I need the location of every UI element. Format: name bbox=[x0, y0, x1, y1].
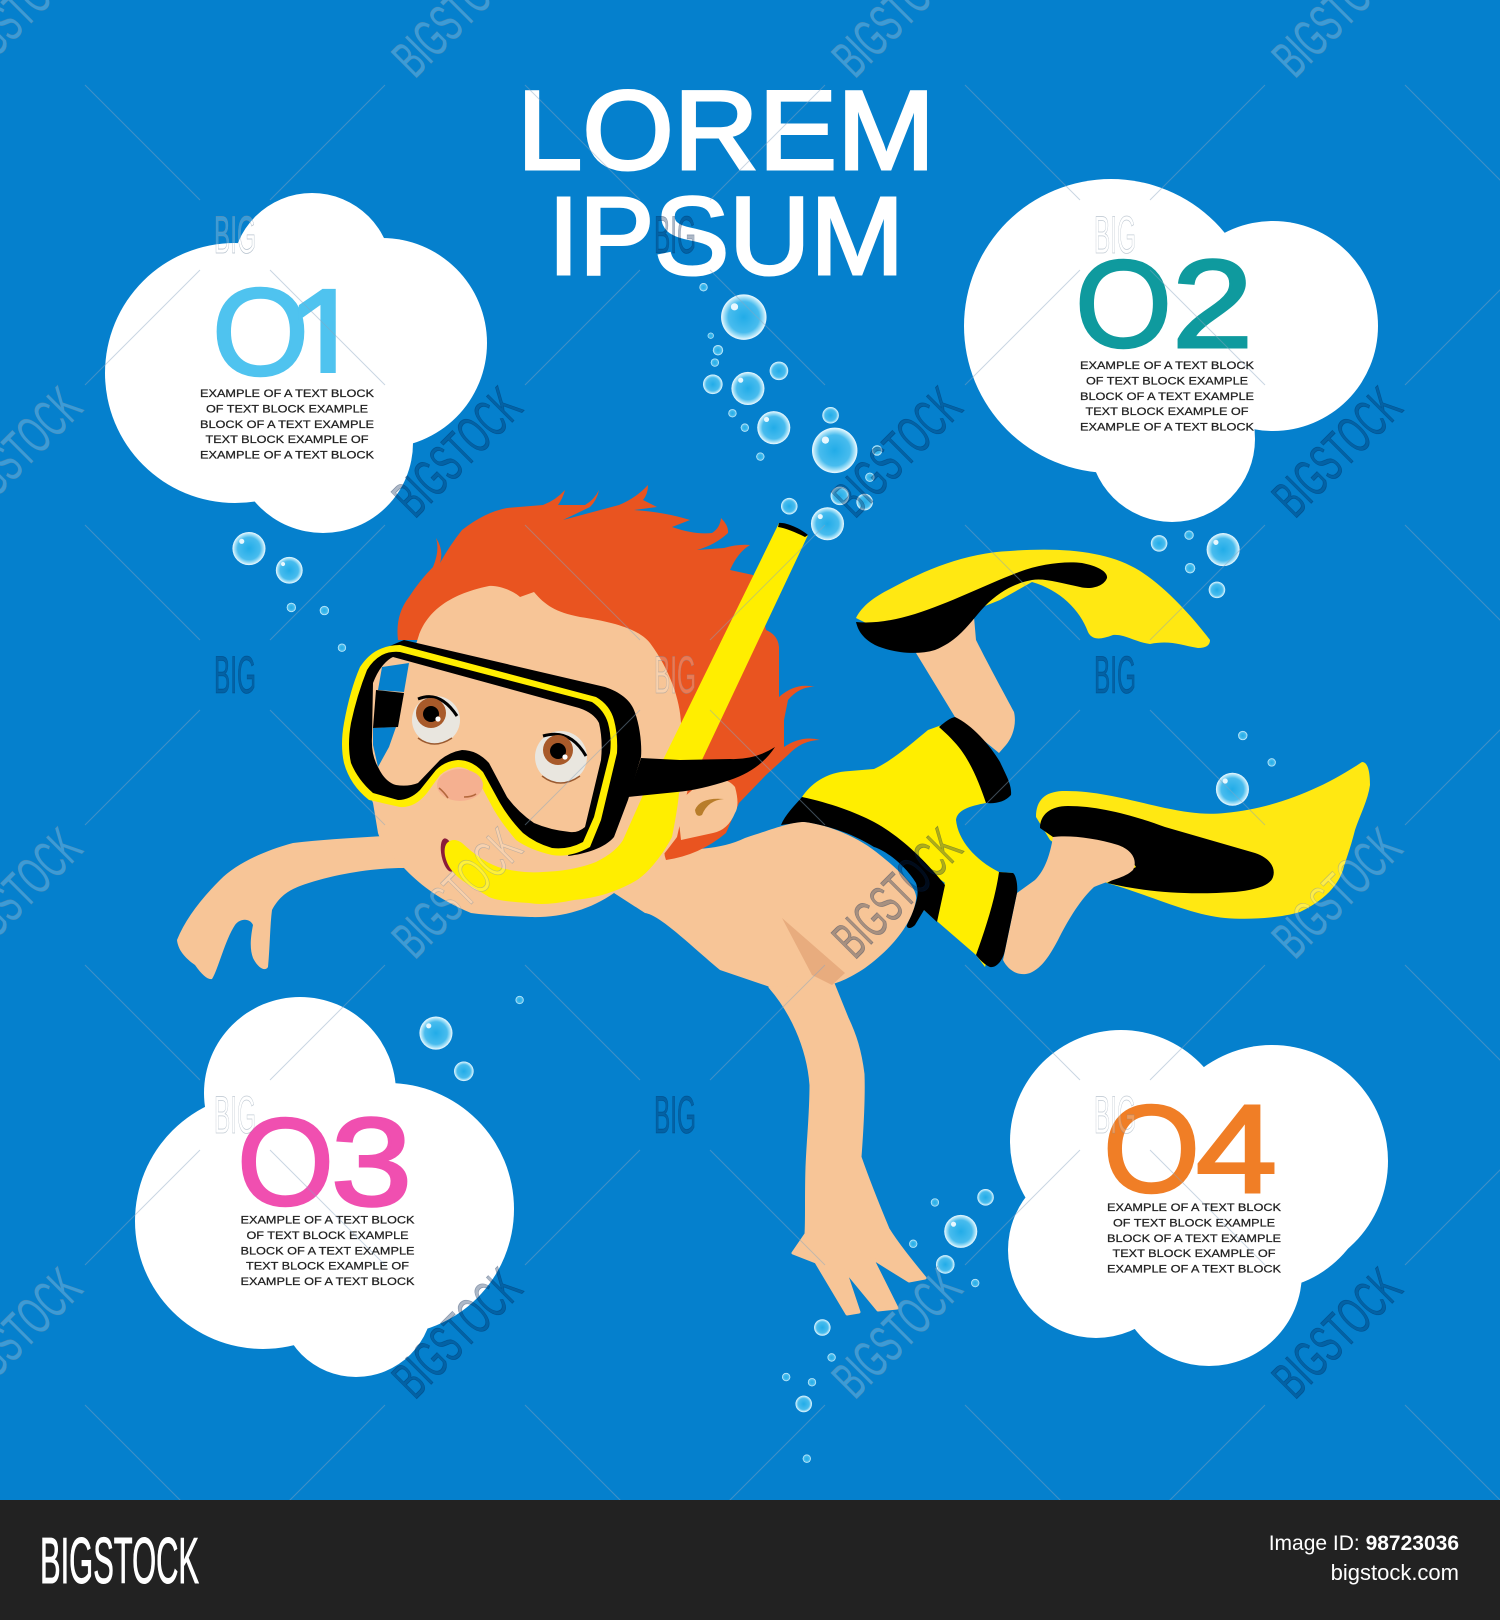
footer bar: BIGSTOCK bbox=[40, 1524, 199, 1597]
footer site url: bigstock.com bbox=[1331, 1560, 1459, 1585]
text block 01: OF TEXT BLOCK EXAMPLE bbox=[206, 404, 368, 416]
number 04: 4 bbox=[1196, 1080, 1277, 1219]
text: BIG bbox=[1094, 1086, 1136, 1145]
text block 03: EXAMPLE OF A TEXT BLOCK bbox=[240, 1276, 415, 1288]
watermark: BIG stamps: BIG bbox=[654, 206, 696, 265]
text block 03: TEXT BLOCK EXAMPLE OF bbox=[246, 1260, 409, 1272]
text block 01: TEXT BLOCK EXAMPLE OF bbox=[206, 434, 369, 446]
text block 03: EXAMPLE OF A TEXT BLOCK bbox=[240, 1214, 415, 1226]
watermark: BIGSTOCK stamps: BIGSTOCK bbox=[1262, 1258, 1413, 1409]
panel: cloud 02 bbox=[964, 179, 1378, 522]
goggle outer black band bbox=[385, 640, 641, 856]
snorkel tube bbox=[445, 523, 808, 904]
text block 03 bbox=[240, 1214, 415, 1288]
number 01: O bbox=[212, 264, 309, 402]
number 02: 2 bbox=[1172, 235, 1253, 374]
swimmer illustration bbox=[177, 485, 1370, 1314]
watermark: BIGSTOCK stamps: BIGSTOCK bbox=[822, 1258, 973, 1409]
text block 01: EXAMPLE OF A TEXT BLOCK bbox=[200, 450, 375, 462]
text block 04: EXAMPLE OF A TEXT BLOCK bbox=[1107, 1202, 1282, 1214]
window water gaps and strap bbox=[373, 663, 409, 767]
text block 01: EXAMPLE OF A TEXT BLOCK bbox=[200, 388, 375, 400]
right arm bbox=[770, 981, 925, 1314]
text block 04: EXAMPLE OF A TEXT BLOCK bbox=[1107, 1264, 1282, 1276]
title bbox=[517, 68, 935, 298]
nose bbox=[437, 769, 483, 801]
left eye bbox=[412, 696, 460, 744]
watermark: BIGSTOCK stamps: BIGSTOCK bbox=[1262, 377, 1413, 528]
watermark: BIG stamps: BIG bbox=[654, 646, 696, 705]
watermark: BIGSTOCK stamps: BIGSTOCK bbox=[382, 818, 533, 969]
text block 02: BLOCK OF A TEXT EXAMPLE bbox=[1080, 391, 1254, 403]
watermark: BIGSTOCK stamps: BIGSTOCK bbox=[382, 377, 533, 528]
number 03: 3 bbox=[331, 1093, 412, 1232]
text block 04 bbox=[1107, 1202, 1282, 1276]
armpit shadow bbox=[782, 918, 845, 985]
title: LOREM bbox=[517, 68, 935, 193]
goggle strap bbox=[628, 747, 775, 797]
number 01 bbox=[216, 286, 336, 378]
watermark: BIG stamps: BIG bbox=[214, 206, 256, 265]
watermark: BIGSTOCK stamps: BIGSTOCK bbox=[382, 1258, 533, 1409]
number 04: O bbox=[1103, 1081, 1200, 1219]
text block 02: EXAMPLE OF A TEXT BLOCK bbox=[1080, 422, 1255, 434]
ear bbox=[677, 779, 738, 840]
number 03 bbox=[237, 1093, 412, 1232]
text: BIG bbox=[1094, 206, 1136, 265]
upper leg bbox=[916, 617, 1015, 753]
top fin bbox=[856, 550, 1210, 648]
text block 03: OF TEXT BLOCK EXAMPLE bbox=[246, 1230, 408, 1242]
top fin foot pocket bbox=[856, 562, 1107, 653]
lower leg bbox=[1003, 836, 1135, 974]
number 02: O bbox=[1075, 236, 1172, 374]
watermark: BIG stamps: BIG bbox=[214, 1086, 256, 1145]
watermark: BIGSTOCK stamps: BIGSTOCK bbox=[822, 377, 973, 528]
text: BIG bbox=[1094, 646, 1136, 705]
text block 04: OF TEXT BLOCK EXAMPLE bbox=[1113, 1218, 1275, 1230]
goggle window and face bbox=[372, 657, 602, 832]
text block 03: BLOCK OF A TEXT EXAMPLE bbox=[240, 1246, 414, 1258]
text block 04: TEXT BLOCK EXAMPLE OF bbox=[1112, 1248, 1276, 1260]
number 01: 1 bbox=[287, 261, 364, 416]
right eye bbox=[535, 731, 587, 783]
watermark: BIG stamps: BIG bbox=[654, 1086, 696, 1145]
number 04 bbox=[1103, 1080, 1277, 1219]
text block 02: EXAMPLE OF A TEXT BLOCK bbox=[1080, 360, 1255, 372]
panel: cloud 04 bbox=[1008, 1030, 1388, 1366]
footer bar bbox=[0, 1500, 1500, 1620]
watermark: BIG stamps bbox=[214, 206, 1136, 1145]
footer image id: Image ID: 98723036 bbox=[1269, 1532, 1459, 1555]
bubbles bbox=[232, 283, 1276, 1463]
watermark: BIGSTOCK stamps: BIGSTOCK bbox=[822, 818, 973, 969]
watermark: BIGSTOCK stamps: BIGSTOCK bbox=[1262, 818, 1413, 969]
goggles bbox=[342, 640, 641, 856]
goggle yellow frame bbox=[342, 645, 617, 856]
text block 02 bbox=[1080, 360, 1255, 434]
panel: cloud 01 bbox=[105, 193, 487, 533]
text block 02: OF TEXT BLOCK EXAMPLE bbox=[1086, 376, 1248, 388]
text block 04: BLOCK OF A TEXT EXAMPLE bbox=[1107, 1233, 1281, 1245]
lower fin bbox=[1036, 762, 1370, 919]
text block 01 bbox=[200, 388, 375, 462]
lower fin foot pocket bbox=[1040, 806, 1274, 893]
goggle inner black frame bbox=[349, 652, 611, 848]
title: IPSUM bbox=[548, 175, 904, 298]
number 03: O bbox=[237, 1094, 334, 1232]
torso bbox=[614, 822, 916, 987]
mouth bbox=[438, 837, 458, 873]
left arm bbox=[177, 836, 404, 979]
hair bbox=[397, 485, 820, 860]
text block 01: BLOCK OF A TEXT EXAMPLE bbox=[200, 419, 374, 431]
watermark: BIG stamps: BIG bbox=[214, 646, 256, 705]
panel: cloud 03 bbox=[135, 997, 514, 1377]
shorts bbox=[781, 717, 1017, 967]
head bbox=[360, 586, 690, 917]
text block 02: TEXT BLOCK EXAMPLE OF bbox=[1086, 406, 1249, 418]
number 02 bbox=[1075, 235, 1253, 374]
